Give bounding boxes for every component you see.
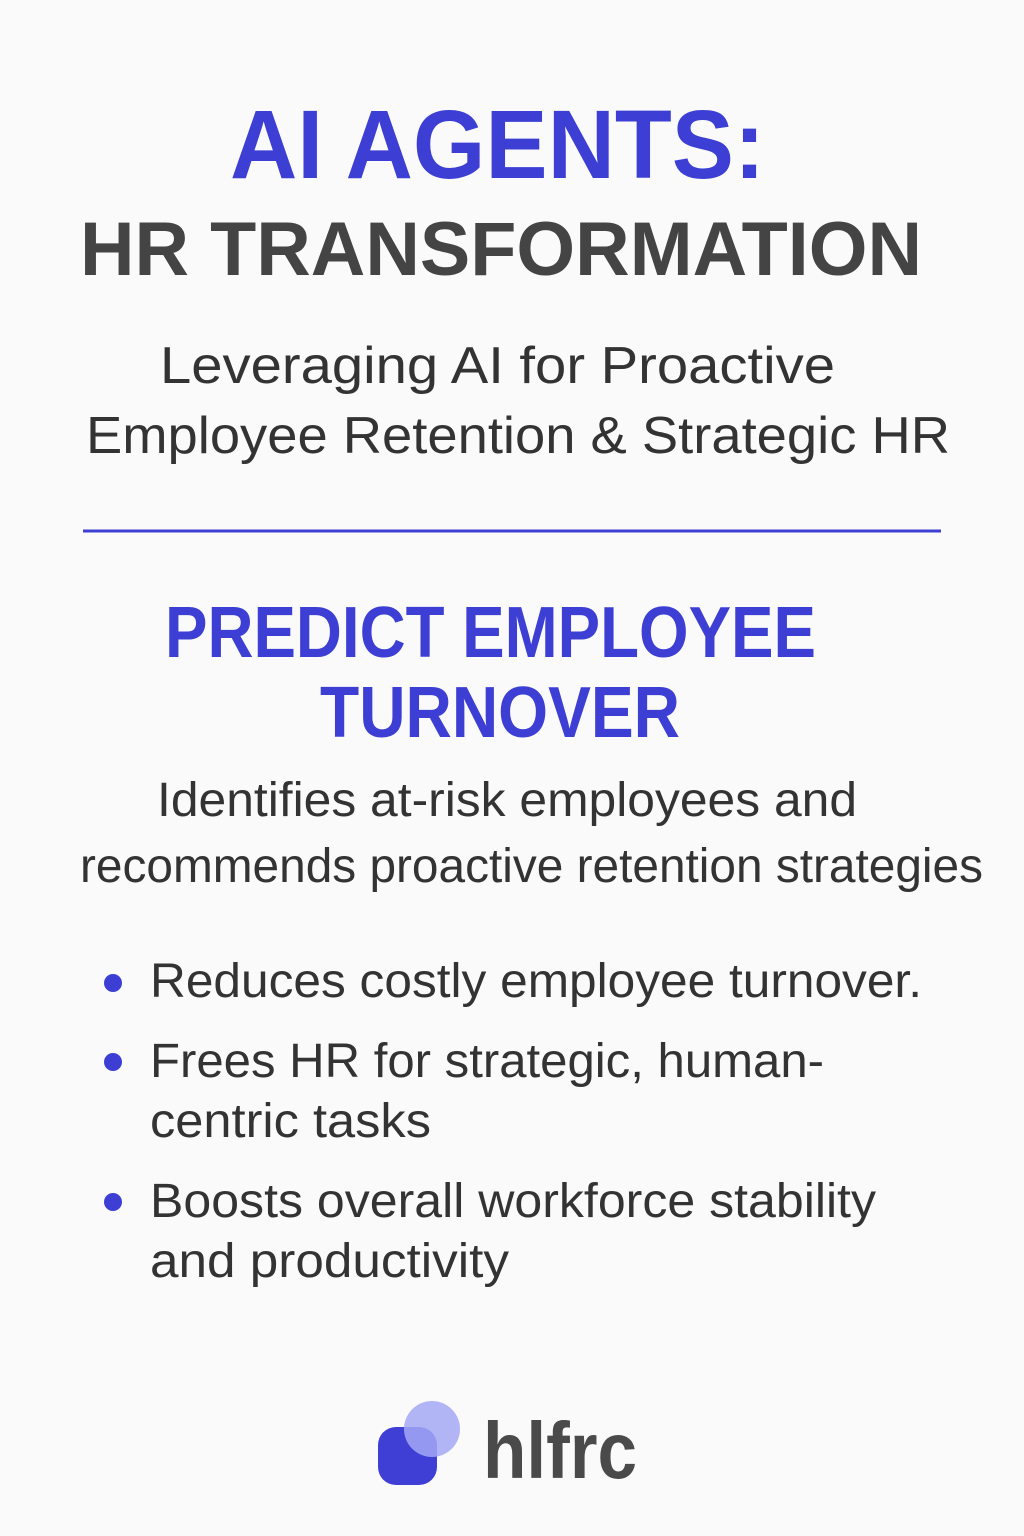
- title: AI AGENTS:: [230, 90, 765, 199]
- bullet list: [104, 955, 922, 1288]
- section heading: PREDICT EMPLOYEE: [165, 593, 816, 673]
- description: Identifies at-risk employees and: [157, 774, 857, 827]
- section heading: TURNOVER: [320, 673, 680, 753]
- subtitle: Leveraging AI for Proactive: [160, 337, 835, 395]
- section heading: [165, 593, 816, 753]
- subtitle: Employee Retention & Strategic HR: [86, 407, 950, 465]
- bullet list: Reduces costly employee turnover.: [150, 955, 922, 1008]
- bullet list: and productivity: [150, 1235, 509, 1288]
- description: [80, 774, 983, 893]
- bullet list: Frees HR for strategic, human-: [150, 1035, 824, 1088]
- subtitle: [86, 337, 950, 465]
- description: recommends proactive retention strategies: [80, 840, 983, 893]
- logo: hlfrc: [483, 1406, 637, 1495]
- logo: [378, 1401, 637, 1495]
- title: HR TRANSFORMATION: [80, 207, 922, 292]
- title: [80, 90, 922, 292]
- bullet list: centric tasks: [150, 1095, 431, 1148]
- bullet list: Boosts overall workforce stability: [150, 1175, 876, 1228]
